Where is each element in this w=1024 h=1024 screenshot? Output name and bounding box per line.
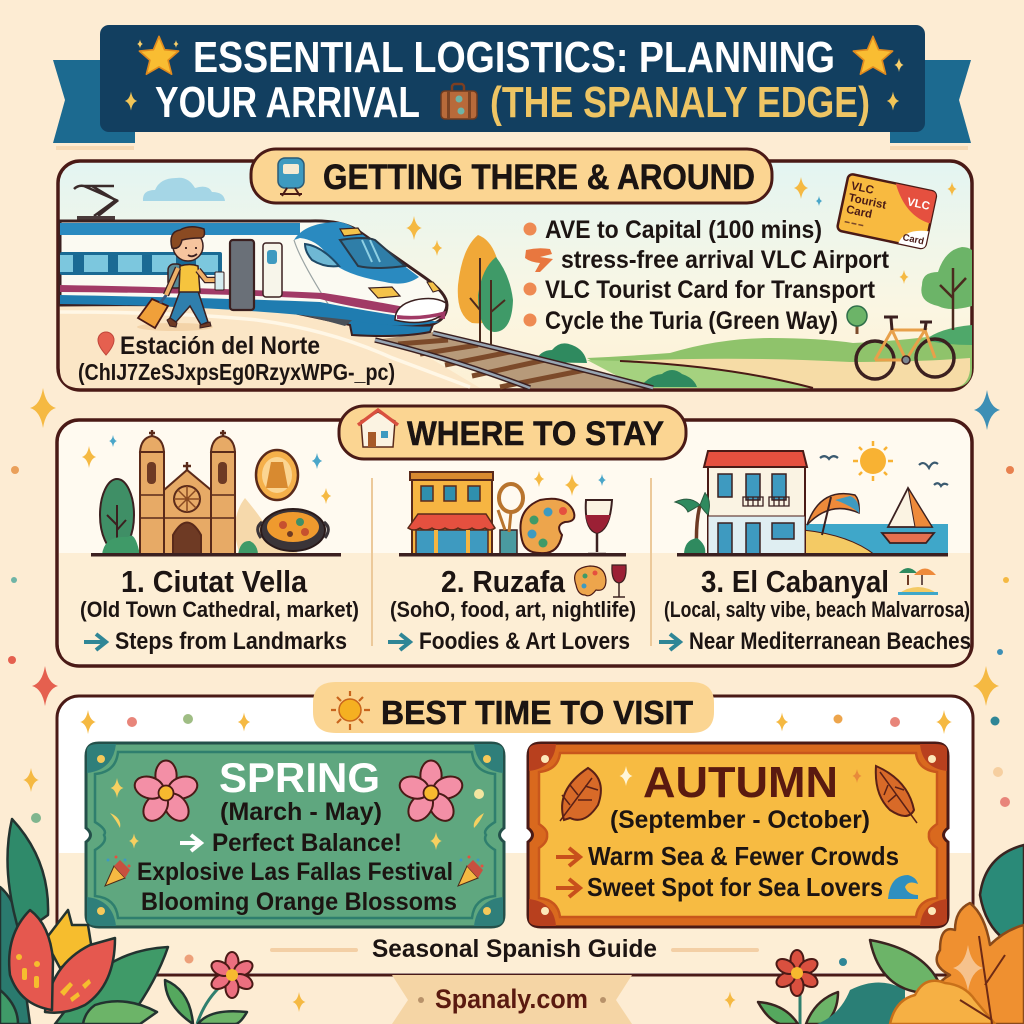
ground line one <box>91 553 341 556</box>
sweet spot: Sweet Spot for Sea Lovers <box>587 872 883 902</box>
VLC tourist card: VLC <box>906 196 931 213</box>
arms <box>166 268 216 295</box>
panel: where to stay <box>57 406 972 666</box>
VLC tourist card <box>837 173 937 249</box>
heading pill: where to stay <box>339 406 686 459</box>
yellow petals <box>45 910 92 968</box>
white door <box>263 243 282 297</box>
explosive fallas: Explosive Las Fallas Festival <box>137 858 453 886</box>
right small flower <box>774 950 820 996</box>
corner rosettes <box>529 744 947 926</box>
icon: house <box>358 410 398 447</box>
cloud <box>143 178 225 201</box>
heading text: WHERE TO STAY <box>407 415 664 453</box>
side window <box>305 244 339 266</box>
benefit: Near Mediterranean Beaches <box>689 628 971 655</box>
icon: orange arrow mark <box>525 248 553 272</box>
shadow <box>137 323 213 331</box>
title line one: ESSENTIAL LOGISTICS: PLANNING <box>193 33 835 82</box>
VLC tourist card: Tourist <box>847 192 887 212</box>
icon: right star <box>853 36 904 74</box>
ground line two <box>399 553 626 556</box>
windows <box>60 255 218 272</box>
face <box>186 247 197 256</box>
column three text <box>659 564 971 655</box>
icon: sparkle right <box>887 92 899 110</box>
torso <box>179 264 200 292</box>
footer dots <box>418 997 606 1003</box>
column divider two <box>650 478 652 646</box>
maroon stripe <box>60 285 445 319</box>
pill shape <box>339 406 686 459</box>
sparkle <box>852 769 862 783</box>
district description: (SohO, food, art, nightlife) <box>390 597 636 622</box>
windshield <box>340 238 405 268</box>
heading text: GETTING THERE & AROUND <box>323 158 755 197</box>
tall leaf <box>8 819 48 935</box>
VLC tourist card: Card <box>845 204 873 221</box>
sparkles <box>406 177 957 284</box>
icon: palette <box>575 566 606 596</box>
door <box>230 240 254 310</box>
caption text: Seasonal Spanish Guide <box>372 935 657 963</box>
station name: Estación del Norte <box>120 332 320 360</box>
watermark sparkle <box>953 945 983 991</box>
railway track <box>375 332 653 388</box>
district name: 2. Ruzafa <box>441 564 566 599</box>
benefit: Foodies & Art Lovers <box>419 628 630 655</box>
spring dates: (March - May) <box>220 798 382 826</box>
benefit: Steps from Landmarks <box>115 628 347 655</box>
lower tint <box>59 553 970 664</box>
heading text: BEST TIME TO VISIT <box>381 694 693 731</box>
orange blossoms: Blooming Orange Blossoms <box>141 888 457 916</box>
sparkle left bottom <box>292 992 306 1012</box>
lower left leaf <box>0 990 18 1024</box>
panel: getting there and around <box>58 149 972 390</box>
icon: suitcase <box>441 84 477 119</box>
district name: 1. Ciutat Vella <box>121 564 308 599</box>
illustration: cathedral and paella <box>82 430 331 555</box>
nose coupler <box>395 299 446 322</box>
icon: train <box>278 158 304 196</box>
text: tourist card: VLC Tourist Card for Transport <box>545 276 876 304</box>
panel: best time to visit <box>23 682 1010 975</box>
arrow <box>84 634 106 650</box>
icon: left star <box>137 36 179 74</box>
right floral corner <box>758 845 1024 1024</box>
right tree <box>921 247 972 330</box>
right landscape <box>535 325 972 388</box>
decorative stars left and right <box>8 388 1014 706</box>
lower tint <box>59 853 971 973</box>
sparkles <box>110 778 484 850</box>
left red petal <box>9 910 53 1010</box>
panel frame <box>57 420 972 666</box>
traveller figure <box>137 227 224 331</box>
caption rule right <box>671 948 759 952</box>
ribbon shape <box>392 975 632 1024</box>
suitcase <box>138 293 168 328</box>
leaf veins <box>960 936 1005 1024</box>
column one text <box>80 564 359 655</box>
head <box>173 231 203 261</box>
icon: party popper left <box>105 856 130 886</box>
inner border <box>539 753 937 917</box>
hair <box>171 227 204 248</box>
text: turia: Cycle the Turia (Green Way) <box>545 307 838 335</box>
ticket <box>215 272 224 290</box>
flower left <box>132 760 200 826</box>
top blue stripe <box>60 223 300 235</box>
icon: small tree <box>847 306 867 334</box>
pantograph <box>74 186 117 216</box>
arrow <box>556 879 580 897</box>
sparkle <box>620 766 632 786</box>
body <box>60 221 447 325</box>
shoes <box>167 318 211 328</box>
flower right <box>397 760 465 826</box>
backpack <box>168 264 183 288</box>
banner shadow <box>56 146 968 150</box>
icon: leaf <box>876 766 917 823</box>
inner border <box>95 752 495 918</box>
pantograph base <box>77 216 115 221</box>
green leaf <box>870 940 940 993</box>
title line two white: YOUR ARRIVAL <box>155 78 420 127</box>
text: AVE to Capital: AVE to Capital (100 mins) <box>545 216 822 244</box>
warm sea: Warm Sea & Fewer Crowds <box>588 841 899 871</box>
heading pill: best time to visit <box>313 682 714 733</box>
autumn title: AUTUMN <box>643 758 838 807</box>
heading pill: getting there <box>251 149 772 203</box>
lower light leaf <box>83 1001 157 1024</box>
column divider one <box>371 478 373 646</box>
big orange leaf <box>920 903 1024 1024</box>
window band <box>60 252 222 275</box>
icon: oak leaf <box>560 768 601 821</box>
white arrow <box>180 835 201 851</box>
illustration: Ruzafa shop and palette <box>408 471 612 555</box>
VLC tourist card: Card <box>901 232 925 247</box>
spring card <box>86 743 504 927</box>
autumn dates: (September - October) <box>610 806 870 834</box>
district name: 3. El Cabanyal <box>701 564 889 599</box>
small flower stem <box>197 985 222 1024</box>
district description: (Old Town Cathedral, market) <box>80 597 359 622</box>
perfect balance: Perfect Balance! <box>212 829 402 857</box>
autumn card <box>528 743 948 927</box>
left small flower <box>209 952 255 998</box>
legs <box>170 291 208 325</box>
small flower leaf left <box>165 980 193 1024</box>
bullet four <box>524 314 536 326</box>
footer ribbon <box>392 975 632 1024</box>
bullet one <box>524 222 536 236</box>
column two text <box>388 564 636 655</box>
teal bush <box>817 982 905 1024</box>
bicycle <box>856 317 954 379</box>
site name: Spanaly.com <box>435 984 588 1014</box>
arrow <box>556 848 580 866</box>
teal leaf <box>980 845 1024 940</box>
yellow lower leaf <box>890 981 995 1024</box>
bullet list <box>524 216 890 335</box>
long green leaf <box>55 947 168 1024</box>
pill shape <box>313 682 714 733</box>
panel frame <box>57 696 973 975</box>
lamps <box>340 228 362 236</box>
right red petal <box>45 938 115 1013</box>
text: stress-free: stress-free arrival VLC Airport <box>561 246 890 274</box>
left floral corner <box>0 819 247 1024</box>
caption rule left <box>270 948 358 952</box>
station code: (ChIJ7ZeSJxpsEg0RzyxWPG-_pc) <box>78 359 395 385</box>
title banner <box>53 25 971 150</box>
ground line three <box>677 553 948 556</box>
stem and leaves of small flower <box>798 990 802 1024</box>
VLC tourist card: VLC <box>850 180 875 197</box>
ticket shape <box>86 743 504 927</box>
icon: wave <box>888 875 918 899</box>
small flower leaf right <box>198 1011 247 1024</box>
dots and sparkles <box>23 710 1010 966</box>
spring title: SPRING <box>219 754 380 801</box>
petal specks <box>16 954 91 1002</box>
arrow <box>388 634 410 650</box>
arrow <box>659 634 680 650</box>
icon: sun <box>331 691 370 730</box>
bullet three <box>524 282 536 296</box>
under skirt <box>280 310 434 336</box>
panel frame <box>58 161 972 390</box>
back leaf <box>0 887 30 1024</box>
banner main plate <box>100 25 925 132</box>
sparkle right bottom <box>724 992 736 1008</box>
ticket shape <box>528 743 948 927</box>
corner dots <box>541 755 936 915</box>
icon: island <box>898 568 938 595</box>
banner ribbon tails <box>53 60 971 143</box>
icon: party popper right <box>458 856 484 886</box>
icon: wine glass <box>612 565 626 597</box>
train <box>60 221 447 336</box>
icon: sparkle left <box>125 92 137 110</box>
guide caption <box>270 935 759 963</box>
title line two gold: (THE SPANALY EDGE) <box>490 78 870 127</box>
platform <box>60 304 480 388</box>
lower blue stripe <box>60 295 440 326</box>
pill shape <box>251 149 772 203</box>
illustration: Cabanyal house and beach <box>675 441 948 555</box>
nose blue <box>294 222 419 284</box>
station location pin <box>98 332 114 355</box>
corner rosettes <box>87 744 503 926</box>
trees <box>458 235 513 345</box>
